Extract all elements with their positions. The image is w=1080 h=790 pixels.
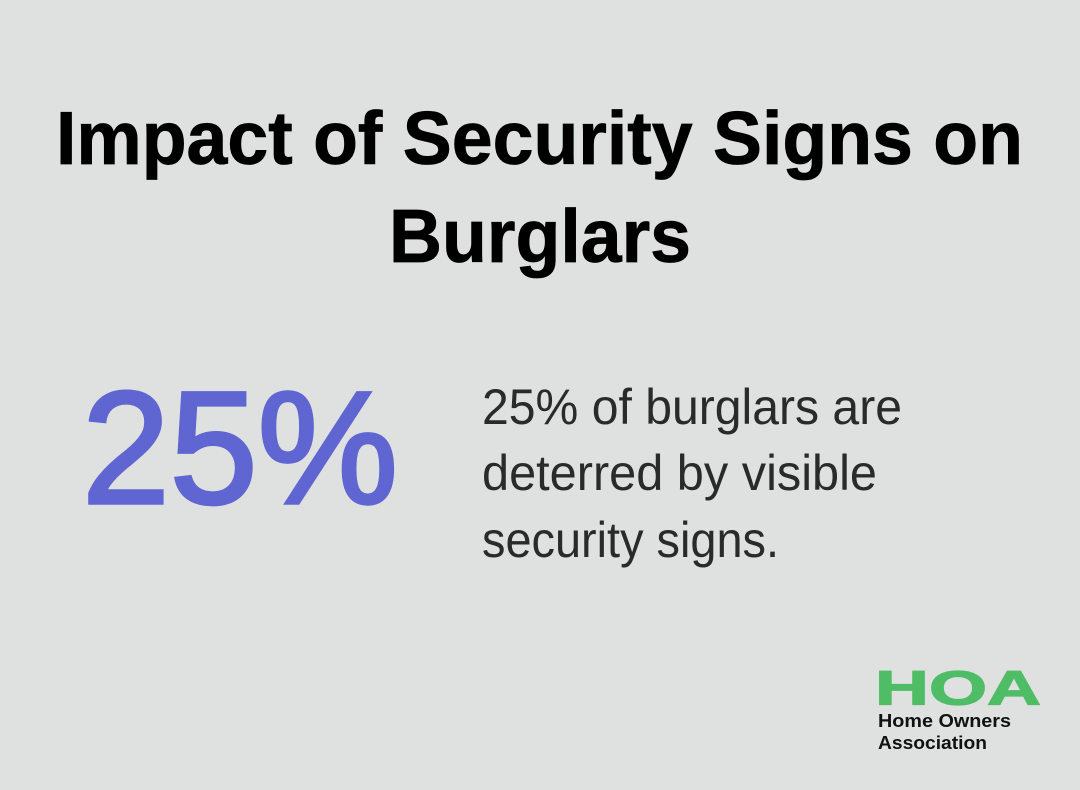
title [56, 96, 1023, 278]
logo wordmark: Association [878, 733, 987, 753]
logo: Home Owners Association [875, 662, 1041, 753]
title: Impact of Security Signs on [56, 96, 1023, 180]
title: Burglars [389, 194, 691, 278]
description text [482, 379, 902, 568]
description text: 25% of burglars are [482, 379, 902, 435]
logo mark: HOA: HOA [875, 662, 1041, 716]
logo wordmark: Home Owners [878, 711, 1011, 731]
description text: security signs. [482, 512, 779, 568]
big statistic: 25%: 25% [82, 358, 398, 537]
description text: deterred by visible [482, 445, 877, 501]
logo wordmark [878, 711, 1011, 753]
